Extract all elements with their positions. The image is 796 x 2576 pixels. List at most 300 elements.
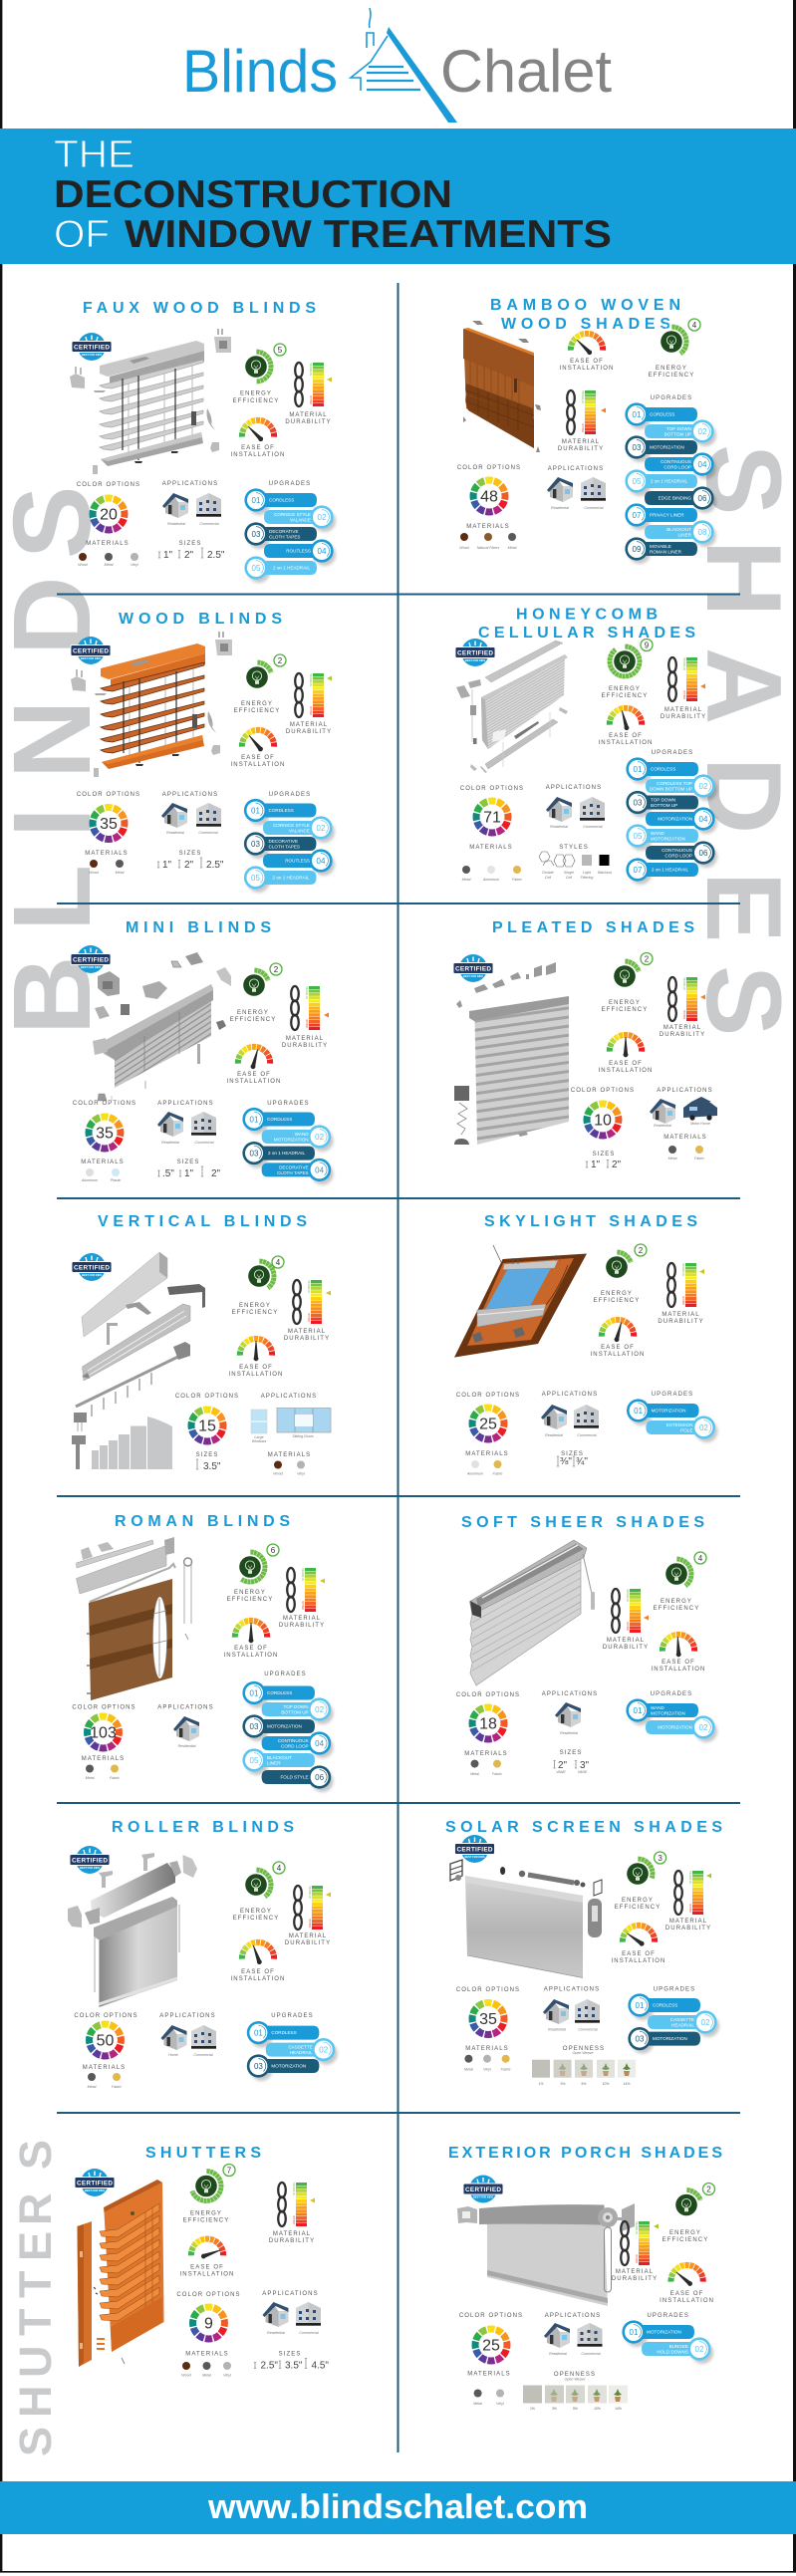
energy efficiency: ENERGY [669, 2230, 701, 2236]
color options [571, 1088, 635, 1136]
color options [459, 2313, 523, 2361]
logo: Blinds [182, 38, 338, 105]
energy efficiency: EFFICIENCY [230, 1017, 276, 1023]
color options [176, 2292, 241, 2339]
material durability: MATERIAL [273, 2231, 311, 2237]
badge: BEST FOR KIDS [463, 974, 483, 978]
applications: Residential [178, 1744, 196, 1748]
styles: Light [583, 871, 592, 875]
materials: Aluminum [81, 1178, 98, 1182]
applications: APPLICATIONS [544, 1986, 600, 1992]
upgrades: BLACKOUT [666, 527, 691, 532]
materials: MATERIALS [268, 1452, 311, 1458]
sizes: 2" [558, 1760, 568, 1771]
ease of installation: EASE OF [234, 1646, 268, 1652]
applications: APPLICATIONS [162, 792, 218, 798]
applications [544, 2313, 602, 2356]
upgrades: 01 [634, 765, 643, 774]
title band: THE [54, 133, 134, 176]
upgrades: MOTORIZATION [271, 2064, 306, 2069]
upgrades: DOWN BOTTOM UP [650, 787, 692, 791]
ease of installation [223, 1621, 279, 1659]
energy efficiency: 2 [706, 2186, 711, 2193]
material durability: WEAK [682, 1010, 686, 1019]
applications: Residential [560, 1731, 578, 1735]
ease of installation: EASE OF [609, 733, 643, 739]
energy efficiency: ENERGY [240, 1909, 272, 1915]
ease of installation: INSTALLATION [223, 1653, 279, 1659]
upgrades: CORDLESS [269, 498, 294, 503]
materials: Vinyl [223, 2373, 231, 2377]
badge [454, 1835, 494, 1863]
color options [74, 2013, 138, 2056]
material durability: MATERIAL [290, 722, 328, 728]
materials: MATERIALS [465, 1451, 509, 1457]
sizes: 2.5" [261, 2361, 278, 2371]
upgrades: 05 [251, 874, 260, 883]
ease of installation: EASE OF [662, 1660, 695, 1666]
sizes: 2" [184, 860, 194, 871]
applications: Residential [161, 1141, 179, 1145]
sizes: 2" [184, 550, 194, 561]
energy efficiency [234, 654, 286, 714]
energy efficiency [602, 640, 653, 699]
materials [462, 845, 522, 882]
applications: APPLICATIONS [157, 1705, 214, 1711]
applications: Residential [550, 825, 568, 829]
badge [453, 954, 493, 982]
upgrades: BUNGEE [669, 2344, 688, 2349]
styles: Cell [545, 876, 551, 880]
applications: Commercial [194, 1141, 214, 1145]
upgrades: UPGRADES [654, 1986, 695, 1992]
ease of installation: INSTALLATION [612, 1958, 665, 1964]
ease of installation [231, 420, 285, 458]
materials: Aluminum [482, 878, 499, 882]
materials: Metal [202, 2373, 211, 2377]
sizes: SIZES [279, 2351, 301, 2357]
materials: Metal [88, 2085, 97, 2089]
color options [73, 1101, 136, 1149]
panel: skylight shades [454, 1213, 717, 1476]
sizes: .5" [162, 1168, 174, 1179]
applications: Residential [548, 2028, 566, 2032]
material durability: STRONG [682, 976, 686, 990]
upgrades: TOP DOWN [666, 426, 691, 431]
material durability [661, 657, 706, 720]
ease of installation [179, 2239, 235, 2278]
applications: Commercial [583, 825, 603, 829]
panel: vertical blinds [72, 1213, 331, 1476]
applications [157, 1705, 214, 1748]
sizes: 4.5" [311, 2361, 329, 2371]
panel: honeycomb cellular shades [455, 606, 717, 885]
ease of installation [560, 334, 614, 372]
styles: Blackout [598, 871, 613, 875]
badge: CERTIFIED [456, 1846, 493, 1853]
material durability: MATERIAL [607, 1638, 645, 1644]
materials: Metal [470, 1772, 479, 1776]
materials: MATERIALS [86, 541, 130, 547]
sizes: 3.5" [203, 1461, 221, 1472]
ease of installation [590, 1320, 646, 1358]
upgrades: WAND [651, 1705, 665, 1710]
badge [455, 639, 495, 666]
material durability: MATERIAL [288, 1329, 326, 1335]
applications: APPLICATIONS [545, 2313, 601, 2319]
material durability: MATERIAL [662, 1312, 700, 1318]
upgrades [242, 1101, 334, 1184]
materials: Vinyl [483, 2068, 491, 2072]
material durability: WEAK [682, 690, 686, 699]
applications: Residential [654, 1124, 671, 1128]
applications [547, 466, 606, 510]
material durability [285, 363, 332, 425]
materials: Fabric [512, 878, 522, 882]
openness: 14% [624, 2082, 630, 2086]
upgrades: CORNICE STYLE [274, 512, 311, 517]
upgrades: 02 [699, 1723, 708, 1732]
ease of installation [598, 708, 654, 746]
material durability [286, 673, 332, 735]
upgrades: 01 [633, 410, 642, 419]
applications: APPLICATIONS [548, 466, 604, 472]
upgrades: 03 [634, 799, 643, 807]
color options [77, 482, 140, 530]
upgrades: 05 [252, 564, 261, 573]
energy efficiency: ENERGY [237, 1010, 269, 1016]
upgrades: 01 [250, 1116, 259, 1124]
upgrades [628, 1986, 719, 2054]
illustration [76, 1537, 192, 1700]
upgrades: 02 [699, 782, 708, 791]
material durability: MATERIAL [289, 1933, 327, 1939]
color options: COLOR OPTIONS [175, 1394, 239, 1400]
upgrades: MOTORIZATION [658, 817, 692, 822]
color options: 103 [90, 1725, 117, 1741]
material durability: WEAK [688, 1904, 692, 1913]
upgrades: DECORATIVE [279, 1164, 309, 1169]
materials: Metal [86, 1776, 95, 1780]
upgrades [626, 750, 717, 885]
materials: Fabric [110, 1776, 120, 1780]
upgrades: 2 on 1 HEADRAIL [273, 876, 310, 881]
applications: Residential [267, 2331, 285, 2335]
energy efficiency: EFFICIENCY [663, 2237, 708, 2243]
applications: APPLICATIONS [157, 1101, 214, 1107]
energy efficiency: 2 [645, 954, 650, 964]
sizes: VANE [578, 1770, 588, 1774]
panel: solar screen shades [445, 1819, 722, 2086]
ease of installation: INSTALLATION [231, 762, 285, 768]
badge [70, 1846, 110, 1874]
material durability: STRONG [682, 657, 686, 670]
openness: 5% [573, 2407, 578, 2411]
color options: COLOR OPTIONS [571, 1088, 635, 1094]
energy efficiency: ENERGY [190, 2211, 222, 2217]
styles: STYLES [559, 845, 589, 851]
materials [181, 2351, 231, 2377]
upgrades: 05 [633, 477, 642, 486]
upgrades: BLACKOUT [267, 1755, 292, 1760]
materials [467, 2371, 511, 2406]
illustration [93, 952, 231, 1101]
heading: SOFT SHEER SHADES [461, 1514, 704, 1531]
illustration [457, 2203, 635, 2306]
badge: CERTIFIED [72, 1857, 108, 1864]
energy efficiency: EFFICIENCY [234, 708, 280, 714]
upgrades: EDGE BINDING [659, 496, 691, 501]
applications: Commercial [198, 831, 218, 835]
sizes: 2" [211, 1168, 221, 1179]
styles: Double [542, 871, 554, 875]
material durability: MATERIAL [669, 1919, 707, 1925]
materials: Wood [78, 563, 89, 567]
materials: Metal [508, 546, 517, 550]
heading [478, 606, 695, 642]
applications [159, 2013, 216, 2057]
energy efficiency: ENERGY [661, 1599, 692, 1605]
material durability: STRONG [635, 2221, 639, 2234]
applications [162, 481, 221, 526]
upgrades: BOTTOM UP [664, 432, 691, 436]
upgrades: CORD LOOP [281, 1743, 309, 1749]
panel: pleated shades [453, 919, 717, 1170]
materials [465, 1451, 509, 1476]
applications: APPLICATIONS [262, 2291, 319, 2297]
sizes: VANE [556, 1770, 566, 1774]
color options: COLOR OPTIONS [72, 1705, 136, 1711]
energy efficiency [594, 1244, 647, 1304]
upgrades: 06 [315, 1773, 325, 1782]
footer band [0, 2481, 796, 2534]
heading: ROMAN BLINDS [115, 1513, 290, 1530]
materials: MATERIALS [465, 2046, 509, 2052]
color options: 48 [480, 488, 498, 506]
upgrades: 05 [250, 1756, 259, 1765]
badge: BEST FOR KIDS [82, 1273, 102, 1277]
upgrades: CLOTH TAPES [269, 534, 300, 540]
upgrades: TOP DOWN [283, 1704, 309, 1709]
energy efficiency: EFFICIENCY [183, 2217, 229, 2223]
material durability: WEAK [681, 1296, 685, 1305]
upgrades: EXTENSION [666, 1422, 692, 1427]
material durability [285, 1885, 331, 1946]
sizes: SIZES [179, 541, 201, 547]
upgrades: HOLD DOWNS [657, 2349, 688, 2355]
upgrades: LINER [267, 1761, 281, 1765]
materials: Fabric [501, 2068, 511, 2072]
upgrades: 04 [698, 460, 707, 469]
material durability: WEAK [305, 1019, 309, 1028]
openness [532, 2046, 636, 2086]
ease of installation: EASE OF [241, 445, 275, 451]
badge [71, 945, 111, 973]
material durability: WEAK [308, 1919, 312, 1928]
sizes: SIZES [560, 1750, 582, 1756]
applications: Commercial [299, 2331, 319, 2335]
heading: CELLULAR SHADES [478, 625, 695, 642]
upgrades: UPGRADES [267, 1101, 310, 1107]
energy efficiency: ENERGY [601, 1291, 633, 1297]
materials: Metal [116, 871, 125, 875]
openness: 1% [539, 2082, 543, 2086]
material durability: STRONG [309, 673, 313, 686]
color options: 35 [96, 1126, 114, 1142]
upgrades: 03 [252, 530, 261, 539]
upgrades: UPGRADES [652, 1392, 693, 1398]
openness: OPENNESS [554, 2372, 596, 2378]
badge: CERTIFIED [465, 2187, 501, 2193]
material durability: DURABILITY [269, 2238, 315, 2244]
upgrades: UPGRADES [269, 792, 311, 798]
energy efficiency [227, 1544, 279, 1603]
material durability: DURABILITY [660, 1032, 705, 1038]
upgrades: HEADRAIL [671, 2022, 694, 2028]
upgrades: 03 [250, 1722, 259, 1731]
upgrades: ROUTLESS [286, 549, 311, 554]
upgrades: CORD LOOP [663, 464, 691, 470]
material durability: STRONG [307, 1279, 311, 1293]
ease of installation: EASE OF [609, 1061, 643, 1067]
energy efficiency: 9 [645, 642, 650, 649]
upgrades: CASSETTE [670, 2017, 694, 2022]
upgrades [625, 395, 716, 564]
energy efficiency: 2 [278, 656, 283, 665]
applications [650, 1088, 717, 1128]
badge [72, 1253, 112, 1281]
energy efficiency: EFFICIENCY [602, 693, 648, 699]
upgrades: 04 [317, 857, 326, 866]
footer band: www.blindschalet.com [207, 2488, 588, 2526]
energy efficiency [654, 1552, 706, 1612]
color options [175, 1394, 239, 1441]
heading: ROLLER BLINDS [112, 1819, 294, 1836]
title band: OF [54, 213, 110, 256]
materials [459, 524, 517, 550]
panel: exterior porch shades [448, 2145, 722, 2411]
material durability [665, 1871, 711, 1932]
sizes [586, 1152, 622, 1170]
materials: Wood [273, 1472, 284, 1476]
upgrades [627, 1392, 717, 1442]
color options: 10 [594, 1112, 612, 1130]
materials [268, 1452, 311, 1476]
material durability: STRONG [308, 1885, 312, 1899]
ease of installation [231, 1942, 285, 1982]
sizes [254, 2351, 329, 2371]
badge: CERTIFIED [457, 649, 493, 656]
materials [663, 1135, 707, 1160]
heading: SKYLIGHT SHADES [484, 1213, 697, 1230]
upgrades: CORDLESS [267, 1117, 292, 1122]
applications: Home [168, 2053, 178, 2057]
logo: Chalet [440, 38, 612, 105]
upgrades: WAND [651, 831, 665, 836]
materials: Natural Fibers [477, 546, 499, 550]
ease of installation [652, 1635, 705, 1673]
materials [82, 1756, 125, 1780]
color options: COLOR OPTIONS [456, 1393, 520, 1399]
background letters: SHUTTERS [10, 2140, 61, 2456]
applications: Residential [551, 506, 569, 510]
materials: MATERIALS [185, 2351, 229, 2357]
sizes: SIZES [196, 1452, 218, 1458]
material durability: DURABILITY [284, 1336, 330, 1342]
color options: COLOR OPTIONS [456, 1692, 520, 1698]
energy efficiency: ENERGY [622, 1898, 654, 1904]
openness: 14% [615, 2407, 622, 2411]
upgrades: CLOTH TAPES [277, 1170, 309, 1175]
energy efficiency: EFFICIENCY [233, 1916, 279, 1922]
material durability [612, 2221, 659, 2282]
materials [83, 2065, 126, 2089]
upgrades: UPGRADES [264, 1672, 307, 1677]
openness: 3% [552, 2407, 557, 2411]
panel: shutters [75, 2145, 329, 2377]
applications: Commercial [193, 2053, 213, 2057]
ease of installation: INSTALLATION [231, 452, 285, 458]
heading: SOLAR SCREEN SHADES [445, 1819, 722, 1836]
energy efficiency: EFFICIENCY [233, 398, 279, 404]
applications: Windows [252, 1439, 266, 1443]
materials: Aluminum [466, 1472, 483, 1476]
badge: BEST FOR KIDS [80, 1866, 100, 1870]
upgrades: 02 [318, 513, 327, 522]
materials: Fabric [112, 2085, 122, 2089]
openness: 5% [582, 2082, 586, 2086]
material durability: MATERIAL [289, 412, 328, 418]
color options: COLOR OPTIONS [460, 786, 524, 792]
badge: CERTIFIED [455, 965, 491, 972]
upgrades [247, 2013, 338, 2081]
ease of installation [598, 1035, 654, 1074]
energy efficiency [663, 2184, 715, 2243]
materials: MATERIALS [466, 524, 510, 530]
upgrades: 03 [254, 2062, 263, 2071]
material durability: DURABILITY [665, 1926, 711, 1932]
color options: 50 [97, 2032, 114, 2050]
sizes: SIZES [561, 1451, 584, 1457]
material durability: STRONG [301, 1568, 305, 1581]
applications: Commercial [199, 522, 219, 526]
color options [72, 1705, 136, 1748]
upgrades: CORDLESS [269, 808, 294, 813]
upgrades: CORDLESS [653, 2003, 677, 2008]
badge: CERTIFIED [74, 344, 110, 351]
materials: MATERIALS [467, 2371, 511, 2377]
ease of installation: INSTALLATION [229, 1372, 283, 1378]
upgrades: UPGRADES [269, 481, 311, 487]
color options: 9 [204, 2315, 213, 2333]
badge: CERTIFIED [77, 2180, 113, 2187]
materials: Fabric [492, 1472, 503, 1476]
upgrades: MOTORIZATION [652, 1409, 685, 1414]
materials: Plastic [111, 1178, 121, 1182]
energy efficiency: EFFICIENCY [615, 1905, 661, 1911]
energy efficiency: ENERGY [239, 1303, 271, 1309]
ease of installation: EASE OF [241, 1969, 275, 1975]
upgrades: CONTINUOUS [278, 1738, 309, 1743]
energy efficiency [232, 1256, 284, 1316]
upgrades [622, 2313, 713, 2364]
material durability [658, 1263, 704, 1325]
materials [81, 1159, 125, 1182]
upgrades: 05 [634, 832, 643, 841]
openness: 3% [561, 2082, 565, 2086]
badge [463, 2176, 503, 2203]
heading: SHUTTERS [145, 2145, 261, 2162]
